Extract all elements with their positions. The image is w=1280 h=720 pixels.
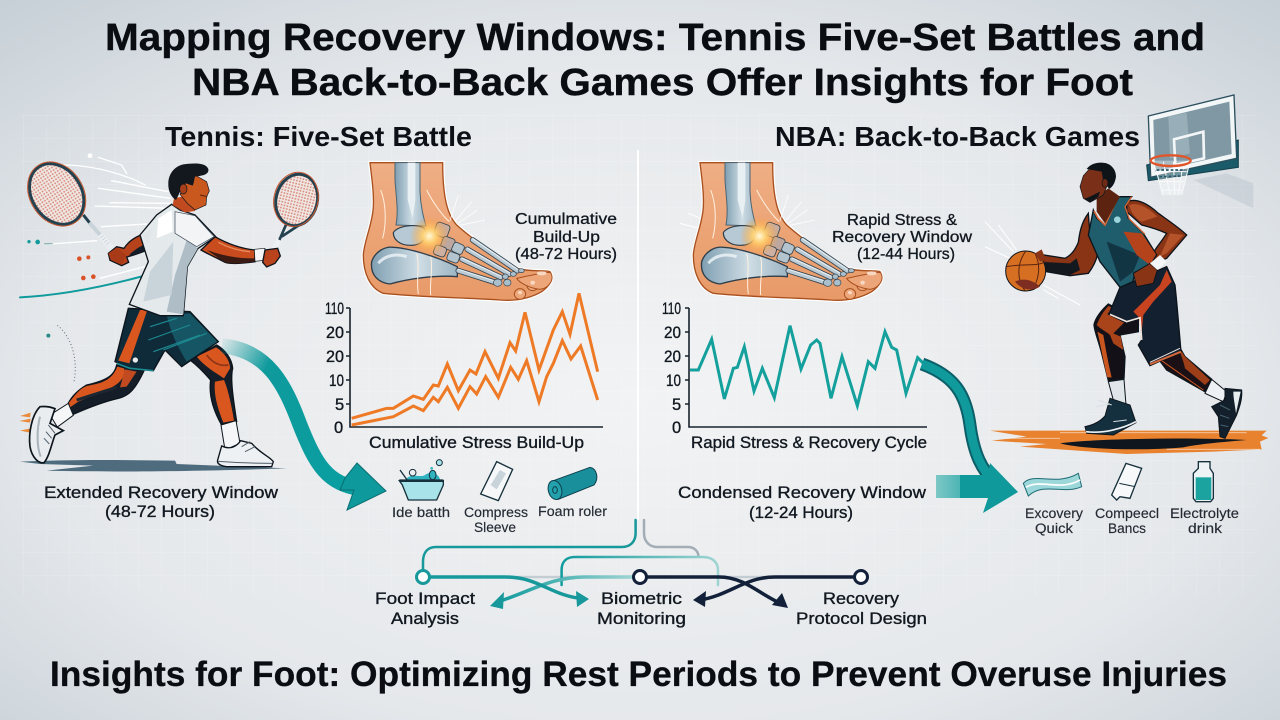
labels: tennis recovery tools: Compress: [464, 505, 528, 520]
chart: tennis cumulative stress: [325, 293, 603, 452]
arrow: NBA to recovery tools: [922, 364, 1018, 513]
title: Mapping Recovery Windows: Tennis Five-Set Battles and: [105, 17, 1205, 59]
icon: electrolyte drink: [1193, 462, 1213, 502]
chart: tennis cumulative stress: 10: [329, 372, 344, 390]
front leg: [1094, 304, 1138, 381]
illustration: basketball player: [985, 163, 1268, 454]
label: foot impact analysis: [375, 590, 475, 628]
foot callout: tennis: (48-72 Hours): [515, 246, 617, 263]
foot: tennis: [363, 163, 552, 300]
chart: tennis cumulative stress: 5: [335, 396, 344, 414]
back leg: [1156, 345, 1212, 392]
foot callout: NBA: (12-44 Hours): [857, 246, 955, 263]
heading: NBA: NBA: Back-to-Back Games: [775, 121, 1140, 152]
chart: NBA rapid stress: 20: [664, 324, 681, 342]
label: biometric monitoring: Monitoring: [597, 610, 686, 628]
foot callout: tennis: Cumulmative: [515, 211, 617, 228]
icon: basketball hoop: [1147, 95, 1253, 208]
foot callout: NBA: Rapid Stress &: [847, 212, 958, 229]
chart: NBA rapid stress: 20: [664, 348, 681, 366]
chart: tennis cumulative stress: Cumulative Stress Build-Up: [369, 434, 584, 452]
chart: tennis cumulative stress: 110: [325, 300, 344, 318]
illustration: tennis player: [16, 151, 324, 471]
flow diagram: foot applications: [423, 520, 861, 604]
front leg: [190, 345, 237, 425]
shorts: [1108, 267, 1181, 366]
label: extended recovery window: [44, 484, 278, 521]
chart: NBA rapid stress: 5: [672, 396, 681, 414]
jersey: [1088, 197, 1157, 287]
head: [1097, 188, 1120, 223]
back arm: [1127, 200, 1187, 262]
labels: NBA recovery tools: Compeecl: [1095, 506, 1159, 521]
label: foot impact analysis: Analysis: [391, 610, 459, 628]
front arm: [201, 237, 255, 263]
shirt: [129, 204, 216, 316]
labels: tennis recovery tools: [392, 504, 608, 535]
icon: ice bath: [399, 460, 443, 500]
chart: tennis cumulative stress: 20: [326, 348, 344, 366]
shadow: [20, 460, 287, 471]
label: extended recovery window: Extended Recovery Window: [44, 484, 278, 502]
label: recovery protocol design: [796, 590, 927, 628]
icon: recovery towel: [1023, 473, 1082, 496]
head: [173, 195, 195, 212]
title: [105, 17, 1205, 104]
labels: tennis recovery tools: Sleeve: [474, 520, 516, 535]
label: condensed recovery window: Condensed Recovery Window: [678, 484, 926, 502]
arrow: tennis to recovery tools: [222, 346, 386, 510]
label: condensed recovery window: [678, 484, 926, 522]
chart: NBA rapid stress: 110: [662, 300, 681, 318]
ball: [1006, 249, 1046, 291]
label: extended recovery window: (48-72 Hours): [105, 503, 215, 521]
labels: tennis recovery tools: Foam roler: [538, 504, 608, 519]
back leg: [68, 365, 144, 415]
back arm: [108, 235, 149, 266]
foot callout: tennis: Build-Up: [533, 229, 600, 246]
labels: NBA recovery tools: Excovery: [1025, 506, 1083, 521]
foot callout: NBA: Recovery Window: [832, 229, 973, 246]
label: biometric monitoring: [597, 590, 686, 628]
icon: compression band: [1112, 463, 1142, 500]
hand and wristband: [1133, 263, 1157, 287]
labels: NBA recovery tools: Bancs: [1108, 521, 1146, 536]
shorts: [115, 308, 218, 371]
heading: tennis: Tennis: Five-Set Battle: [165, 121, 472, 152]
foot callout: tennis: [515, 211, 617, 263]
label: recovery protocol design: Protocol Design: [796, 610, 927, 628]
labels: NBA recovery tools: Electrolyte: [1170, 506, 1239, 521]
chart: NBA rapid stress: 10: [666, 372, 681, 390]
labels: NBA recovery tools: drink: [1188, 521, 1222, 536]
icon: compression sleeve tube: [481, 462, 513, 501]
labels: tennis recovery tools: Ide batth: [392, 505, 450, 520]
chart: NBA rapid stress: [662, 300, 927, 452]
label: foot impact analysis: Foot Impact: [375, 590, 475, 608]
label: recovery protocol design: Recovery: [823, 590, 900, 608]
labels: NBA recovery tools: Quick: [1035, 521, 1073, 536]
icon: foam roller: [546, 467, 597, 501]
chart: NBA rapid stress: Rapid Stress & Recovery Cycle: [691, 434, 927, 452]
flow arrowheads and nodes: [416, 570, 868, 609]
labels: NBA recovery tools: [1025, 506, 1239, 536]
label: biometric monitoring: Biometric: [601, 590, 682, 608]
title: NBA Back-to-Back Games Offer Insights for Foot: [192, 62, 1133, 104]
front arm: [1030, 213, 1097, 276]
footer headline: Insights for Foot: Optimizing Rest Periods to Prevent Overuse Injuries: [50, 655, 1227, 694]
chart: tennis cumulative stress: 0: [334, 419, 343, 437]
chart: tennis cumulative stress: 20: [326, 324, 344, 342]
foot callout: NBA: [832, 212, 973, 263]
chart: NBA rapid stress: 0: [672, 419, 681, 437]
foot: NBA: [680, 163, 882, 300]
label: condensed recovery window: (12-24 Hours): [749, 504, 853, 522]
